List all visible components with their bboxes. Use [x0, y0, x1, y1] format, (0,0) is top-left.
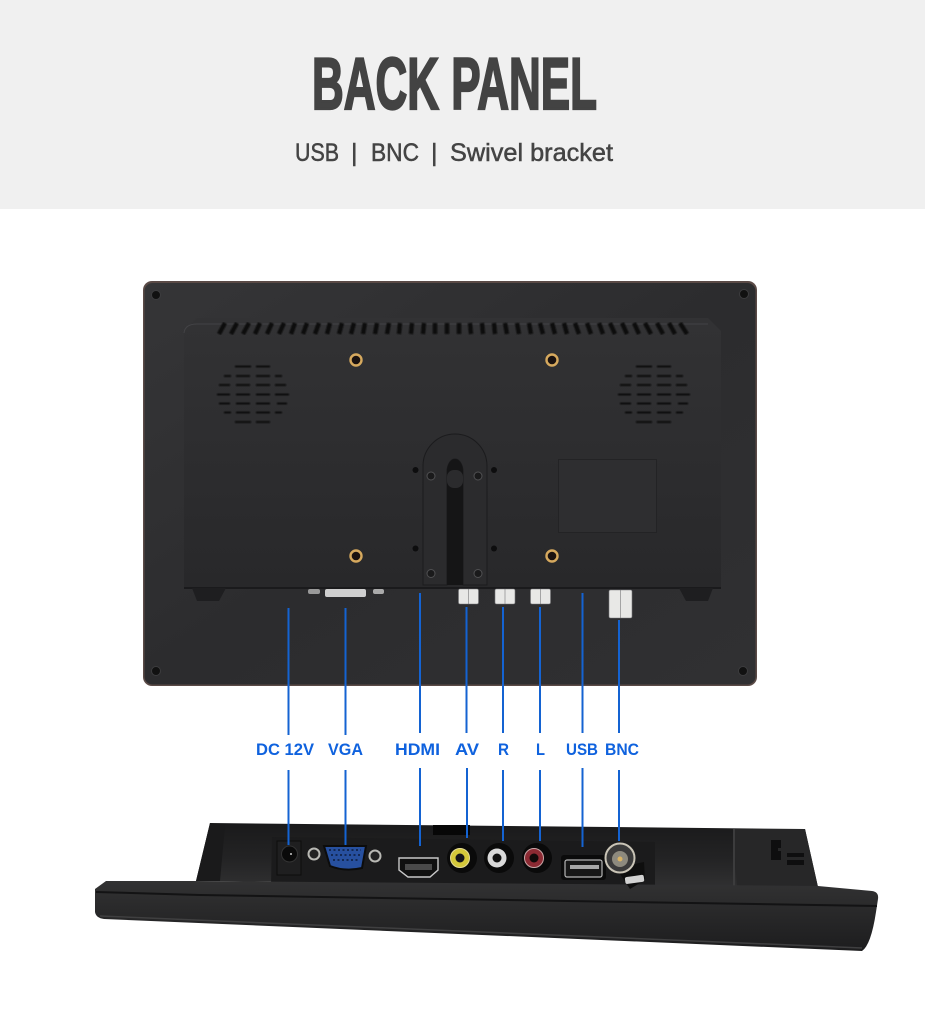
VGA port [308, 846, 380, 870]
subtitle: | [431, 139, 438, 167]
monitor bottom view [95, 823, 878, 951]
port labels: VGA [328, 741, 363, 759]
callout lines [288, 593, 619, 847]
port labels: BNC [605, 741, 639, 759]
monitor rear view [143, 281, 757, 686]
port labels [256, 741, 639, 759]
right speaker grille [618, 366, 690, 422]
subtitle: Swivel bracket [450, 139, 613, 167]
HDMI port [399, 858, 438, 877]
title: BACK PANEL [312, 44, 597, 125]
subtitle: | [351, 139, 358, 167]
subtitle [295, 139, 613, 167]
ventilation slots [219, 323, 687, 334]
port labels: L [536, 741, 545, 759]
subtitle: BNC [371, 139, 419, 167]
housing feet [192, 588, 226, 601]
port labels: HDMI [395, 741, 440, 759]
port labels: R [498, 741, 509, 759]
R jack [484, 843, 514, 873]
port labels: AV [455, 741, 479, 759]
port labels: USB [566, 741, 598, 759]
protruding VGA connector [308, 589, 384, 597]
brass mounting inserts [350, 354, 558, 562]
label plate recess [558, 460, 656, 532]
raised rear housing [184, 318, 721, 588]
left speaker grille [217, 366, 289, 422]
subtitle: USB [295, 139, 339, 167]
protruding RCA jacks [458, 589, 632, 618]
frame screws [152, 290, 748, 676]
AV jack [447, 843, 477, 873]
swivel bracket [423, 434, 487, 585]
VESA holes [412, 467, 497, 552]
port labels: DC 12V [256, 741, 314, 759]
vent slots [771, 840, 804, 865]
USB port [561, 855, 606, 880]
L jack [522, 843, 552, 873]
port recess [271, 837, 655, 887]
housing body [196, 823, 818, 887]
front bezel [95, 881, 878, 951]
header band [0, 0, 925, 209]
DC jack [277, 841, 301, 875]
BNC connector [606, 844, 645, 889]
